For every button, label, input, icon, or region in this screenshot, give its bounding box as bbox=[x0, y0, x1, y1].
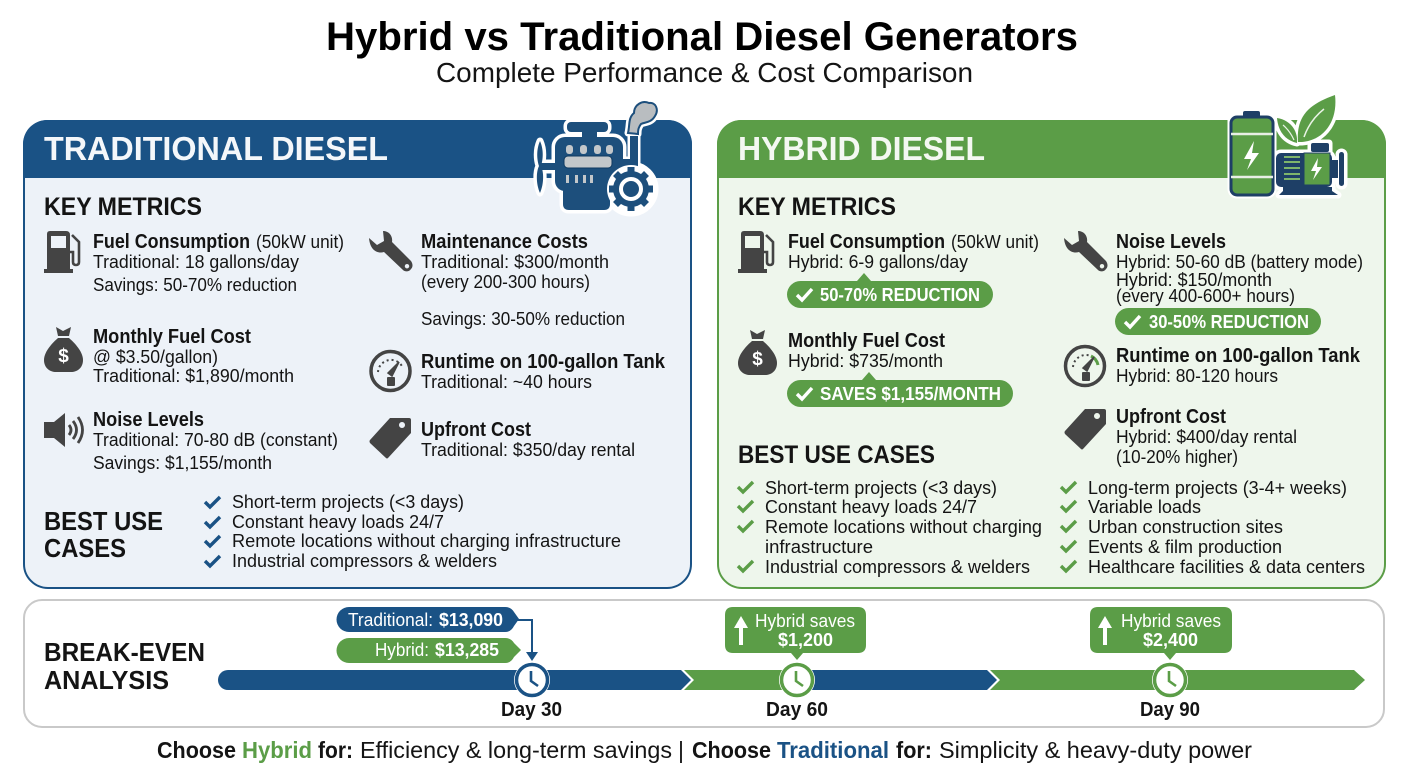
panel header: hybrid: HYBRID DIESEL bbox=[738, 130, 985, 167]
panel header: traditional bbox=[23, 120, 692, 178]
icon: money bag: $ bbox=[752, 349, 763, 370]
metric: upfront cost: Traditional: $350/day rental bbox=[421, 440, 635, 460]
list: hybrid use cases, first column bbox=[738, 478, 1042, 577]
subtitle: Complete Performance & Cost Comparison bbox=[436, 57, 973, 88]
badge: 50-70% reduction bbox=[787, 273, 993, 308]
callout: day 60 saving: Hybrid saves bbox=[755, 611, 855, 631]
list: hybrid use cases, first column: Remote locations without charging bbox=[765, 517, 1042, 537]
label: day 30: Day 30 bbox=[501, 699, 562, 721]
metric: monthly fuel cost bbox=[738, 330, 1013, 407]
callout: day 90 saving: $2,400 bbox=[1143, 630, 1198, 650]
metric: noise levels bbox=[1064, 231, 1363, 335]
icon: money bag bbox=[44, 327, 83, 372]
panel header: traditional: TRADITIONAL DIESEL bbox=[44, 130, 388, 167]
callout: hybrid total bbox=[336, 638, 521, 663]
callout: traditional total bbox=[336, 607, 519, 632]
callout: hybrid total: Hybrid: bbox=[375, 640, 429, 660]
metric: fuel consumption: Fuel Consumption bbox=[93, 231, 250, 253]
metric: runtime on tank: Runtime on 100-gallon Tank bbox=[1116, 345, 1361, 367]
metric: maintenance costs: Savings: 30-50% reduction bbox=[421, 309, 625, 329]
list: hybrid use cases, first column: Constant heavy loads 24/7 bbox=[765, 497, 977, 517]
metric: upfront cost: Upfront Cost bbox=[421, 419, 531, 441]
label: day 60: Day 60 bbox=[766, 699, 828, 721]
metric: fuel consumption: (50kW unit) bbox=[256, 232, 344, 252]
timeline bar bbox=[218, 670, 1365, 690]
icon: speaker bbox=[44, 413, 82, 447]
callout: day 90 saving bbox=[1090, 607, 1232, 660]
icon: fuel gauge bbox=[371, 352, 410, 390]
list: hybrid use cases, first column: infrastructure bbox=[765, 537, 873, 557]
metric: runtime on tank: Traditional: ~40 hours bbox=[421, 372, 592, 392]
icon: fuel gauge bbox=[1066, 346, 1104, 386]
clock: day 90 bbox=[1152, 662, 1188, 698]
metric: monthly fuel cost: Monthly Fuel Cost bbox=[788, 330, 945, 352]
metric: noise levels: Hybrid: $150/month bbox=[1116, 270, 1272, 290]
heading: key metrics: KEY METRICS bbox=[44, 193, 202, 221]
list: traditional best use cases bbox=[205, 492, 621, 571]
panel header: hybrid bbox=[717, 120, 1386, 178]
metric: upfront cost: Hybrid: $400/day rental bbox=[1116, 427, 1297, 447]
heading: key metrics: KEY METRICS bbox=[738, 193, 896, 221]
icon: wrench bbox=[1064, 231, 1108, 271]
callout: traditional total: Traditional: bbox=[348, 610, 433, 630]
metric: noise levels: (every 400-600+ hours) bbox=[1116, 286, 1295, 306]
metric: upfront cost bbox=[1064, 406, 1297, 467]
metric: runtime on tank bbox=[371, 351, 666, 392]
footer recommendation: Simplicity & heavy-duty power bbox=[939, 737, 1252, 763]
footer recommendation: Hybrid bbox=[242, 737, 312, 763]
footer recommendation: Choose bbox=[692, 737, 771, 763]
metric: upfront cost bbox=[370, 418, 635, 460]
list: traditional best use cases: Industrial compressors & welders bbox=[232, 551, 497, 571]
metric: noise levels bbox=[44, 409, 338, 473]
list: traditional best use cases: Short-term projects (<3 days) bbox=[232, 492, 464, 512]
metric: monthly fuel cost: Traditional: $1,890/month bbox=[93, 366, 294, 386]
list: hybrid use cases, first column: Industrial compressors & welders bbox=[765, 557, 1030, 577]
metric: fuel consumption: Traditional: 18 gallons/day bbox=[93, 252, 299, 272]
callout: day 60 saving: $1,200 bbox=[778, 630, 833, 650]
icon: money bag bbox=[738, 330, 777, 375]
icon: wrench bbox=[369, 231, 412, 271]
metric: fuel consumption bbox=[44, 231, 344, 295]
icon: fuel pump bbox=[738, 231, 773, 273]
heading: best use cases bbox=[44, 506, 163, 563]
metric: noise levels: Noise Levels bbox=[1116, 231, 1226, 253]
footer recommendation: for: bbox=[318, 737, 353, 763]
metric: noise levels: Hybrid: 50-60 dB (battery mode) bbox=[1116, 252, 1363, 272]
heading: break-even analysis: ANALYSIS bbox=[44, 665, 169, 695]
list: traditional best use cases: Remote locations without charging infrastructure bbox=[232, 531, 621, 551]
metric: monthly fuel cost bbox=[44, 326, 294, 386]
panel: traditional diesel bbox=[23, 102, 692, 588]
badge: saves per month bbox=[787, 372, 1013, 407]
metric: maintenance costs: (every 200-300 hours) bbox=[421, 272, 590, 292]
footer recommendation: Choose bbox=[157, 737, 236, 763]
list: hybrid use cases, second column bbox=[1061, 478, 1365, 577]
list: hybrid use cases, second column: Variable loads bbox=[1088, 497, 1201, 517]
arrow: to day 30 bbox=[516, 620, 538, 661]
clock: day 60 bbox=[779, 662, 815, 698]
icon: battery, motor and leaf bbox=[1231, 95, 1344, 195]
panel: hybrid diesel bbox=[717, 95, 1386, 588]
metric: noise levels: Traditional: 70-80 dB (constant) bbox=[93, 430, 338, 450]
icon: price tag bbox=[370, 418, 411, 458]
heading: best use cases: BEST USE bbox=[44, 506, 163, 536]
title: Hybrid vs Traditional Diesel Generators bbox=[326, 15, 1078, 59]
list: hybrid use cases, second column: Events & film production bbox=[1088, 537, 1282, 557]
icon: money bag: $ bbox=[58, 346, 69, 367]
icon: engine with gear and smoke bbox=[537, 102, 657, 213]
heading: break-even analysis: BREAK-EVEN bbox=[44, 637, 205, 667]
footer recommendation: | bbox=[678, 737, 684, 763]
footer recommendation: Efficiency & long-term savings bbox=[360, 737, 672, 763]
clock: day 30 bbox=[514, 662, 550, 698]
badge: 30-50% reduction: 30-50% REDUCTION bbox=[1149, 312, 1309, 332]
metric: monthly fuel cost: Monthly Fuel Cost bbox=[93, 326, 251, 348]
metric: fuel consumption: (50kW unit) bbox=[951, 232, 1039, 252]
badge: 30-50% reduction bbox=[1115, 308, 1321, 335]
icon: fuel pump bbox=[44, 231, 79, 273]
icon: price tag bbox=[1064, 409, 1106, 450]
heading: best use cases: BEST USE CASES bbox=[738, 441, 935, 469]
metric: fuel consumption: Savings: 50-70% reduction bbox=[93, 275, 297, 295]
metric: noise levels: Savings: $1,155/month bbox=[93, 453, 272, 473]
heading: best use cases: CASES bbox=[44, 533, 126, 563]
metric: runtime on tank: Hybrid: 80-120 hours bbox=[1116, 366, 1278, 386]
metric: monthly fuel cost: Hybrid: $735/month bbox=[788, 351, 943, 371]
metric: upfront cost: (10-20% higher) bbox=[1116, 447, 1238, 467]
metric: upfront cost: Upfront Cost bbox=[1116, 406, 1226, 428]
footer recommendation bbox=[157, 737, 1252, 763]
callout: hybrid total: $13,285 bbox=[435, 640, 499, 660]
list: hybrid use cases, second column: Urban construction sites bbox=[1088, 517, 1283, 537]
metric: noise levels: Noise Levels bbox=[93, 409, 204, 431]
footer recommendation: for: bbox=[896, 737, 932, 763]
metric: maintenance costs bbox=[369, 231, 625, 329]
callout: day 90 saving: Hybrid saves bbox=[1121, 611, 1221, 631]
heading: break-even analysis bbox=[44, 637, 205, 695]
metric: fuel consumption: Fuel Consumption bbox=[788, 231, 945, 253]
metric: runtime on tank bbox=[1066, 345, 1361, 386]
list: traditional best use cases: Constant heavy loads 24/7 bbox=[232, 512, 444, 532]
list: hybrid use cases, second column: Healthcare facilities & data centers bbox=[1088, 557, 1365, 577]
list: hybrid use cases, first column: Short-term projects (<3 days) bbox=[765, 478, 997, 498]
badge: saves per month: SAVES $1,155/MONTH bbox=[820, 384, 1001, 404]
metric: fuel consumption bbox=[738, 231, 1039, 308]
metric: monthly fuel cost: @ $3.50/gallon) bbox=[93, 347, 218, 367]
metric: maintenance costs: Maintenance Costs bbox=[421, 231, 588, 253]
badge: 50-70% reduction: 50-70% REDUCTION bbox=[820, 285, 980, 305]
callout: day 60 saving bbox=[725, 607, 866, 660]
metric: maintenance costs: Traditional: $300/month bbox=[421, 252, 609, 272]
label: day 90: Day 90 bbox=[1140, 699, 1200, 721]
footer recommendation: Traditional bbox=[777, 737, 889, 763]
panel: break-even analysis bbox=[24, 600, 1384, 727]
metric: runtime on tank: Runtime on 100-gallon Tank bbox=[421, 351, 666, 373]
callout: traditional total: $13,090 bbox=[439, 610, 503, 630]
list: hybrid use cases, second column: Long-term projects (3-4+ weeks) bbox=[1088, 478, 1347, 498]
metric: fuel consumption: Hybrid: 6-9 gallons/day bbox=[788, 252, 968, 272]
